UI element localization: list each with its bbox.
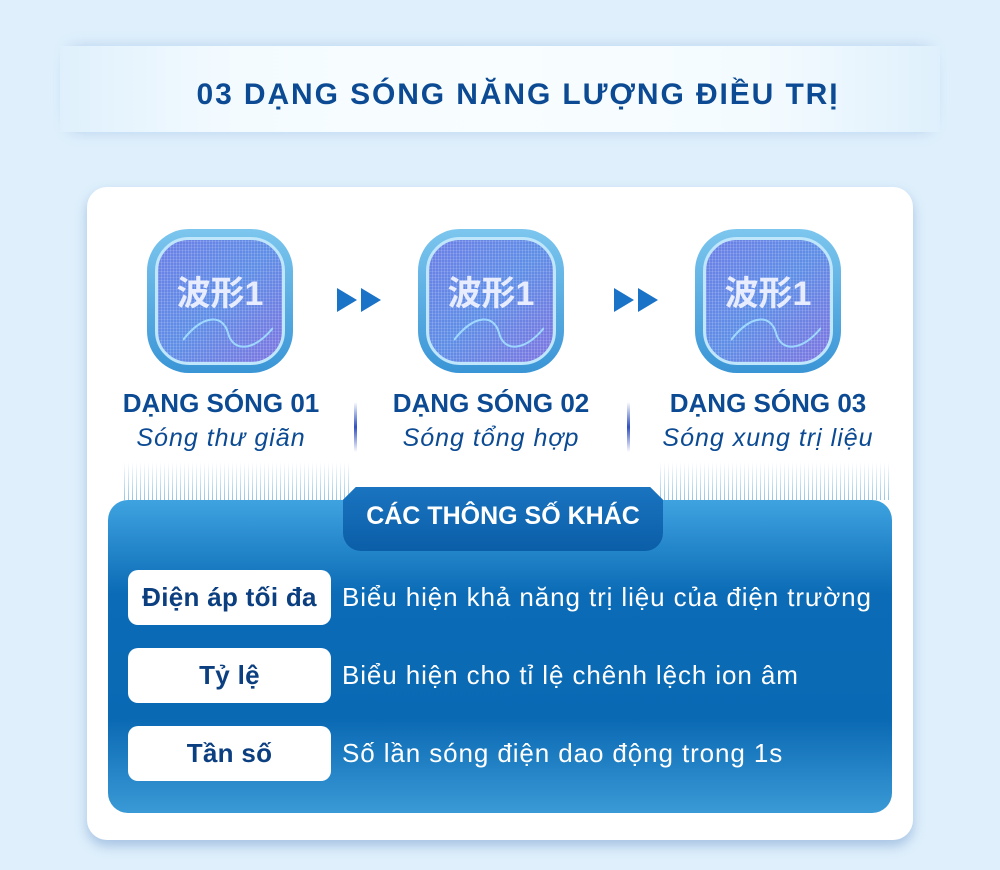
label 1: DẠNG SÓNG 01	[123, 388, 319, 418]
tab heading	[343, 487, 663, 551]
row 3	[128, 726, 783, 781]
title: 03 DẠNG SÓNG NĂNG LƯỢNG ĐIỀU TRỊ	[196, 78, 840, 111]
icon: wave 1: 波形1	[177, 275, 263, 313]
icon: wave 2	[418, 229, 564, 373]
icon: wave 2: 波形1	[448, 275, 534, 313]
label 2: Sóng tổng hợp	[403, 424, 579, 452]
row 1	[128, 570, 872, 625]
label 1: Sóng thư giãn	[136, 424, 306, 452]
panel: other parameters	[108, 500, 892, 813]
title band	[60, 46, 940, 132]
main card	[87, 187, 913, 840]
label 2	[393, 388, 589, 452]
row 1: Điện áp tối đa	[142, 582, 317, 612]
label 2: DẠNG SÓNG 02	[393, 388, 589, 418]
row 2: Biểu hiện cho tỉ lệ chênh lệch ion âm	[342, 660, 799, 690]
label 1	[123, 388, 319, 452]
row 3: Tần số	[187, 738, 272, 768]
label 3	[662, 388, 874, 452]
label 3: DẠNG SÓNG 03	[670, 388, 866, 418]
arrow 1	[337, 288, 381, 312]
label 3: Sóng xung trị liệu	[662, 424, 874, 452]
icon: wave 1	[147, 229, 293, 373]
tab heading: CÁC THÔNG SỐ KHÁC	[366, 502, 640, 530]
row 2	[128, 648, 799, 703]
row 3: Số lần sóng điện dao động trong 1s	[342, 738, 783, 768]
row 2: Tỷ lệ	[199, 660, 260, 690]
icon: wave 3: 波形1	[725, 275, 811, 313]
icon: wave 3	[695, 229, 841, 373]
arrow 2	[614, 288, 658, 312]
row 1: Biểu hiện khả năng trị liệu của điện trường	[342, 582, 872, 612]
